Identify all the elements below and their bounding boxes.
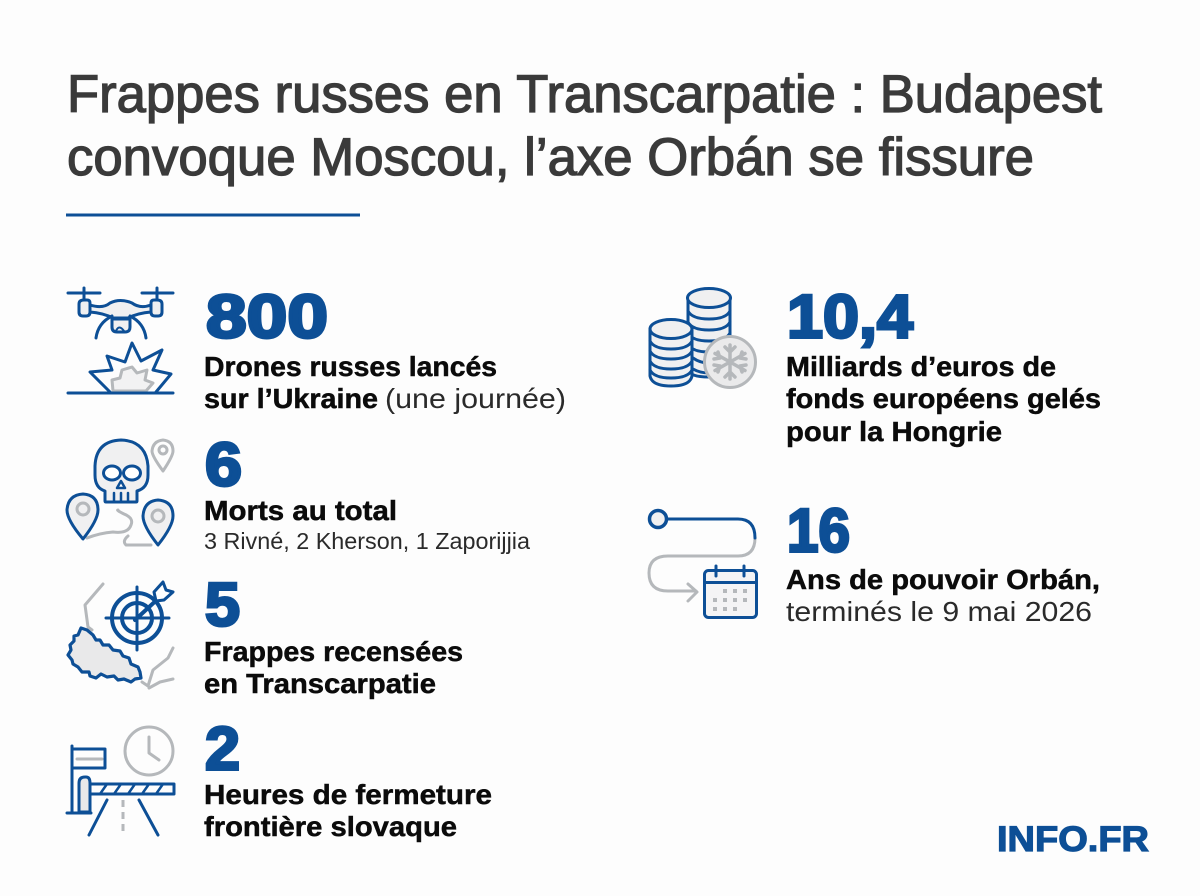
logo: INFO.FR: INFO.FR [997, 820, 1149, 859]
label: morts: 3 Rivné, 2 Kherson, 1 Zaporijjia [204, 528, 530, 554]
title [67, 65, 1102, 187]
label: drones: (une journée) [385, 383, 566, 414]
number: 5: 5 [205, 570, 240, 638]
label: pouvoir [786, 564, 1100, 627]
label: drones [204, 351, 566, 414]
number: 6: 6 [205, 430, 242, 498]
panel: pouvoir [649, 496, 1100, 627]
number: 2: 2 [205, 714, 240, 782]
icon: skull and map pins [67, 440, 173, 545]
label: frontiere: frontière slovaque [204, 811, 457, 842]
label: fonds: Milliards d’euros de [786, 351, 1056, 382]
label: fonds: fonds européens gelés [786, 383, 1101, 414]
icon: target over map [68, 582, 173, 688]
panel: frontiere [67, 714, 492, 842]
title: Frappes russes en Transcarpatie : Budapest [67, 65, 1102, 124]
number: 10,4: 10,4 [787, 282, 913, 350]
icon: coins with snowflake [650, 288, 756, 388]
icon: timeline and calendar [649, 510, 756, 618]
number: 16: 16 [787, 496, 850, 564]
icon: drone and explosion [68, 288, 173, 393]
label: pouvoir: Ans de pouvoir Orbán, [786, 564, 1100, 595]
label: frontiere [204, 779, 492, 842]
label: frontiere: Heures de fermeture [204, 779, 492, 810]
label: frappes [204, 636, 463, 699]
panel: fonds [650, 282, 1101, 447]
label: fonds [786, 351, 1101, 447]
panel: morts [67, 430, 530, 554]
number: 800: 800 [206, 282, 328, 350]
label: frappes: Frappes recensées [204, 636, 463, 667]
icon: border barrier and clock [67, 727, 174, 836]
title: convoque Moscou, l’axe Orbán se fissure [67, 128, 1034, 187]
label: morts [204, 495, 530, 554]
label: morts: Morts au total [204, 495, 397, 526]
label: fonds: pour la Hongrie [786, 416, 1002, 447]
label: drones: Drones russes lancés [204, 351, 497, 382]
label: frappes: en Transcarpatie [204, 668, 436, 699]
panel: frappes [68, 570, 463, 699]
label: pouvoir: terminés le 9 mai 2026 [786, 596, 1092, 627]
label: drones: sur l’Ukraine [204, 383, 378, 414]
panel: drones [68, 282, 566, 414]
